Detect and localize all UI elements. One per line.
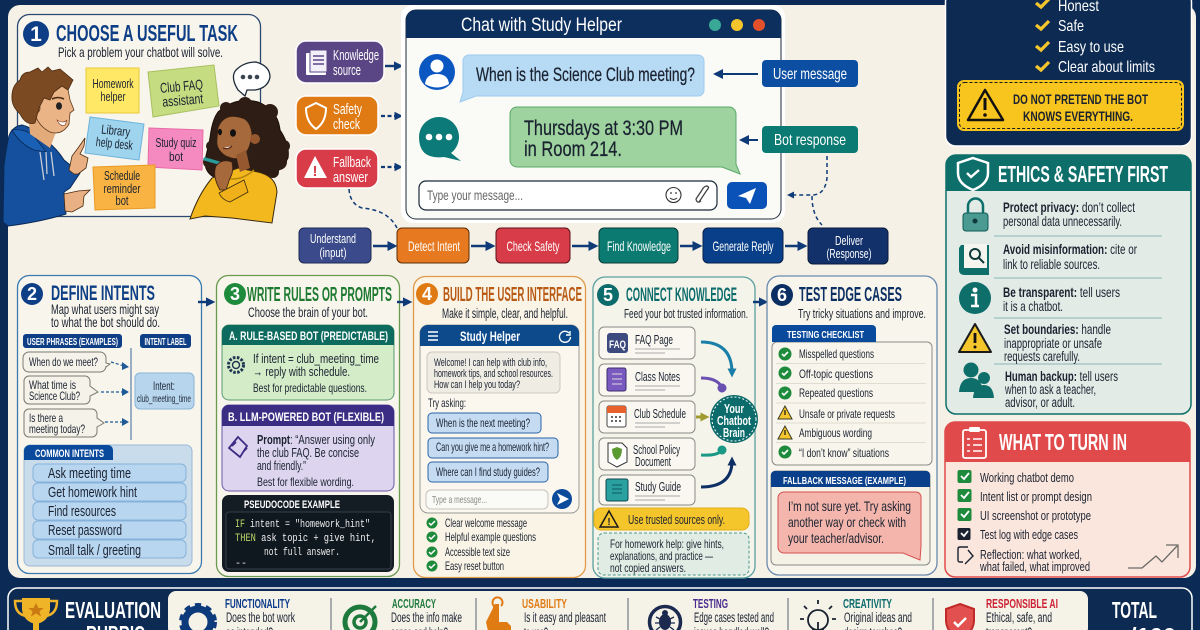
total score: TOTAL (1112, 597, 1157, 623)
flow step: detect intent (397, 228, 469, 263)
side box: knowledge source: Knowledge (333, 47, 379, 64)
flow step: check safety: Check Safety (506, 238, 560, 254)
message field: Type a message... (432, 494, 487, 506)
rubric title: EVALUATION (65, 597, 161, 623)
label: user message: User message (773, 66, 847, 83)
rubric: accuracy: Does the info make (391, 610, 462, 625)
arrow: safety to chat (381, 115, 400, 117)
turn-in checklist: Reflection: what worked, (980, 547, 1082, 562)
source: club schedule: Club Schedule (634, 406, 686, 421)
subtitle: Pick a problem your chatbot will solve. (58, 44, 223, 60)
testing checklist: Unsafe or private requests (799, 407, 895, 421)
code block: pseudocode: IF intent = "homework_hint" (235, 519, 370, 531)
flow step: understand (299, 228, 371, 263)
flow step: understand: (input) (320, 245, 346, 260)
tab: user phrases (23, 334, 122, 348)
chat header: Chat with Study Helper (461, 15, 623, 36)
bubble: is there a meeting (24, 409, 104, 437)
sticky: study quiz bot (148, 128, 203, 170)
app mockup: Try asking: (428, 396, 466, 410)
icon: refresh (560, 331, 570, 342)
heading: step 3: 3 (230, 284, 240, 304)
sticky: library help desk: Library (101, 122, 131, 140)
sticky: homework helper (86, 68, 139, 113)
arrow: fallback to detect intent (349, 189, 397, 228)
sticky: homework helper: helper (100, 89, 126, 104)
card B: LLM-powered bot: Best for flexible wording. (257, 475, 354, 489)
side box: fallback answer: answer (333, 169, 368, 186)
card A: rule-based bot (222, 325, 394, 400)
subtitle: Feed your bot trusted information. (624, 306, 748, 321)
welcome bubble: How can I help you today? (434, 379, 520, 391)
message input (419, 181, 717, 210)
bubble: what time: What time is (29, 378, 76, 392)
bubble: when do we meet (23, 352, 110, 372)
checklist: bot qualities (1036, 0, 1155, 76)
rubric: testing: TESTING (693, 596, 728, 611)
panel: what to turn in (945, 422, 1190, 577)
homework help note: For homework help: give hints, (610, 537, 724, 551)
heading: step 5: 5 (603, 285, 613, 305)
source: study guide: Study Guide (635, 479, 681, 494)
red header: WHAT TO TURN IN (999, 429, 1127, 455)
source: FAQ page (599, 327, 695, 359)
icon: upward trend (1128, 545, 1178, 568)
side box: safety check: check (333, 116, 360, 133)
fallback message: your teacher/advisor. (788, 530, 884, 546)
source: study guide (599, 475, 695, 505)
icon: sparkle brain (229, 437, 247, 457)
code block: pseudocode: THEN ask topic + give hint, (235, 533, 376, 545)
heading: step 1 (23, 20, 238, 47)
item: set boundaries: requests carefully. (1004, 349, 1080, 364)
side box: safety check (296, 96, 378, 135)
welcome bubble: homework tips, and school resources. (434, 368, 553, 380)
item: be transparent: it is a chatbot. (1003, 298, 1063, 314)
bubble: when do we meet: When do we meet? (29, 355, 98, 369)
bubble: is there a meeting: meeting today? (29, 422, 85, 436)
intent list: Ask meeting time (48, 466, 131, 482)
rubric title (65, 597, 161, 630)
suggestion buttons: When is the next meeting? (436, 416, 530, 430)
item: set boundaries (959, 321, 1111, 364)
item: set boundaries: inappropriate or unsafe (1004, 336, 1102, 351)
panel 4: build the user interface (414, 276, 586, 578)
knowledge arrows (696, 342, 732, 487)
flow step: find knowledge (599, 228, 678, 263)
flow step: deliver (808, 228, 888, 264)
arrow: step 3 to 4 (397, 301, 409, 303)
sticky: homework helper: Homework (92, 76, 134, 91)
turn-in checklist: Intent list or prompt design (980, 489, 1092, 504)
item: avoid misinformation: Avoid misinformation: cite or (1003, 241, 1137, 257)
intent box: Intent: (153, 381, 175, 393)
source: school policy (599, 438, 695, 470)
rubric: responsible AI: Ethical, safe, and (986, 610, 1052, 625)
side box: knowledge source (296, 41, 384, 83)
panel: bot qualities (946, 0, 1192, 146)
arrow: knowledge to chat (385, 65, 400, 67)
rubric: usability: Is it easy and pleasant (524, 610, 606, 625)
sticky: study quiz bot: bot (169, 149, 183, 164)
checklist: Helpful example questions (445, 530, 536, 544)
sticky: club FAQ assistant (148, 65, 219, 117)
rubric: functionality: Does the bot work (226, 610, 295, 625)
card A: rule-based bot: A. RULE-BASED BOT (PREDICTABLE) (229, 329, 388, 343)
testing checklist: Misspelled questions (799, 347, 874, 361)
rubric: accuracy: ACCURACY (392, 596, 436, 611)
tab: user phrases: USER PHRASES (EXAMPLES) (27, 336, 118, 348)
intent list: Reset password (48, 523, 122, 539)
flow step: deliver: (Response) (826, 246, 872, 261)
text: ! (312, 163, 318, 180)
intent list: Small talk / greeting (48, 543, 141, 559)
arrowheads (122, 362, 129, 426)
your chatbot brain (710, 395, 758, 443)
card B: LLM-powered bot: B. LLM-POWERED BOT (FLEXIBLE) (228, 410, 384, 424)
item: set boundaries: Set boundaries: handle (1004, 321, 1111, 337)
checklist (426, 516, 536, 573)
item: avoid misinformation: link to reliable sources. (1003, 256, 1100, 272)
fallback message: another way or check with (788, 514, 906, 530)
suggestion buttons (428, 413, 558, 482)
icon: gear (228, 358, 244, 372)
sticky: club FAQ assistant: assistant (162, 90, 204, 110)
heading: step 2: DEFINE INTENTS (51, 282, 155, 305)
flow step: detect intent: Detect Intent (408, 238, 460, 254)
text: BUILD THE USER INTERFACE (443, 284, 582, 306)
warning banner: DO NOT PRETEND THE BOT (1013, 91, 1148, 107)
illustration: girl in yellow sweater (190, 97, 290, 223)
label: user message (762, 60, 858, 87)
testing checklist: TESTING CHECKLIST (787, 329, 864, 341)
side box: fallback answer: Fallback (333, 154, 371, 171)
arrow: user message label (717, 73, 758, 75)
intent list: Get homework hint (48, 485, 137, 501)
homework help note (598, 533, 749, 575)
rubric bar (8, 588, 1192, 630)
icon: speech bubble (233, 62, 270, 96)
heading: step 4: 4 (422, 284, 432, 304)
side box: safety check: Safety (333, 101, 362, 118)
testing checklist (772, 325, 932, 465)
warning banner (957, 80, 1184, 131)
fallback message: I’m not sure yet. Try asking (788, 498, 911, 514)
card B: LLM-powered bot: Prompt: “Answer using only (257, 432, 375, 447)
app mockup: Study Helper (460, 329, 521, 344)
arrow: deliver to chat (790, 156, 827, 225)
arrow: bot response label (743, 139, 758, 141)
trusted sources note (594, 508, 749, 530)
card A: rule-based bot: → reply with schedule. (253, 364, 350, 379)
trusted sources note: ! (607, 517, 611, 528)
testing checklist: Ambiguous wording (799, 426, 872, 440)
panel 5: connect knowledge: CONNECT KNOWLEDGE (626, 285, 737, 306)
message field (426, 490, 548, 509)
item: protect privacy (963, 198, 1135, 231)
source: FAQ page: FAQ Page (635, 332, 673, 347)
intent box (135, 373, 194, 409)
checklist: Easy reset button (445, 559, 504, 573)
subtitle: Make it simple, clear, and helpful. (442, 306, 568, 321)
panel: common intents: COMMON INTENTS (35, 448, 104, 460)
intent list: Find resources (48, 504, 116, 520)
heading: step 6 (771, 284, 902, 306)
flow step: find knowledge: Find Knowledge (607, 238, 671, 254)
user message bubble: When is the Science Club meeting? (476, 64, 695, 86)
fallback message: FALLBACK MESSAGE (EXAMPLE) (783, 475, 906, 487)
rubric: testing (650, 596, 774, 630)
item: human backup: Human backup: tell users (1005, 368, 1118, 384)
fallback message (771, 471, 930, 565)
rubric: functionality (181, 596, 295, 630)
item: human backup: advisor, or adult. (1005, 395, 1075, 410)
rubric: responsible AI (946, 596, 1058, 630)
panel 5: connect knowledge (593, 277, 758, 578)
homework help note: explanations, and practice — (610, 549, 713, 563)
heading: step 1: 1 (30, 23, 42, 46)
sticky: club FAQ assistant: Club FAQ (159, 76, 204, 96)
checklist: bot qualities: Clear about limits (1058, 59, 1155, 76)
bot response bubble (510, 107, 740, 174)
panel 2: define intents (18, 276, 202, 574)
label: bot response (762, 126, 858, 153)
side box: knowledge source: source (333, 62, 361, 79)
source: class notes: Class Notes (635, 369, 680, 384)
flow step: understand: Understand (310, 231, 356, 246)
checklist: Clear welcome message (445, 516, 527, 530)
code block: pseudocode: -- (235, 559, 247, 570)
item: protect privacy: personal data unnecessarily. (1003, 213, 1122, 229)
turn-in checklist: Working chatbot demo (980, 470, 1074, 485)
code block: pseudocode (222, 495, 394, 572)
item: human backup: when to ask a teacher, (1004, 382, 1096, 397)
side box: fallback answer (296, 149, 378, 188)
testing checklist: “I don’t know” situations (799, 446, 889, 460)
arrow: step 2 to 3 (198, 301, 212, 303)
rubric: accuracy (345, 596, 462, 630)
heading: step 3: WRITE RULES OR PROMPTS (247, 284, 392, 306)
ethics header (946, 155, 1191, 191)
card A: rule-based bot: If intent = club_meeting_time (253, 351, 379, 366)
icon: warning (304, 156, 327, 178)
card B: LLM-powered bot: the club FAQ. Be concise (257, 445, 359, 460)
testing checklist: Repeated questions (799, 386, 873, 400)
bubble: is there a meeting: Is there a (29, 411, 63, 425)
card A: rule-based bot: Best for predictable questions. (253, 381, 367, 395)
sticky: study quiz bot: Study quiz (156, 135, 196, 150)
card B: LLM-powered bot: and friendly.” (257, 458, 306, 473)
panel 6: test edge cases (767, 276, 937, 575)
panel: chat window (401, 5, 785, 223)
bubble: what time (24, 376, 98, 404)
sticky: schedule reminder bot: reminder (104, 181, 141, 196)
arrow: step 5 to 6 (753, 301, 765, 303)
heading: step 2: 2 (27, 284, 37, 304)
turn-in checklist: UI screenshot or prototype (980, 508, 1091, 523)
bot response bubble: in Room 214. (524, 138, 622, 161)
sticky: schedule reminder bot: Schedule (104, 168, 140, 183)
turn-in checklist: what failed, what improved (979, 559, 1090, 574)
icon: user avatar (419, 54, 455, 90)
testing checklist: Off-topic questions (799, 367, 873, 381)
app mockup (420, 325, 579, 513)
code block: pseudocode: PSEUDOCODE EXAMPLE (244, 499, 340, 511)
fallback speech bubble (778, 492, 921, 560)
flow step: generate reply (703, 228, 783, 263)
rubric: creativity: Original ideas and (844, 610, 912, 625)
source: FAQ page: FAQ (609, 339, 626, 351)
bubble: what time: Science Club? (29, 389, 80, 403)
illustration: boy in blue hoodie (3, 67, 90, 226)
checklist: Accessible text size (445, 545, 510, 559)
panel: ethics and safety first (946, 155, 1191, 414)
subtitle: Map what users might say (51, 301, 159, 317)
flow step: deliver: Deliver (835, 233, 863, 248)
icon: book (306, 50, 327, 75)
intent list (33, 464, 186, 559)
subtitle: Choose the brain of your bot. (248, 305, 368, 320)
rubric: usability (486, 596, 606, 630)
dashed arrows (101, 362, 124, 422)
red header (945, 422, 1190, 462)
message input: Type your message... (427, 187, 523, 203)
source: class notes (599, 364, 695, 396)
item: avoid misinformation (959, 241, 1137, 275)
card B: LLM-powered bot (222, 405, 394, 491)
welcome bubble: Welcome! I can help with club info, (434, 357, 547, 369)
warning banner: KNOWS EVERYTHING. (1023, 108, 1133, 124)
checklist: bot qualities: Safe (1058, 18, 1084, 35)
icon: shield (306, 103, 326, 129)
homework help note: not copied answers. (610, 561, 686, 575)
send button (727, 182, 767, 209)
heading: step 2 (21, 282, 155, 305)
flow: pipeline (299, 228, 888, 264)
tab: intent label: INTENT LABEL (144, 336, 187, 348)
subtitle: to what the bot should do. (51, 314, 160, 330)
checklist: bot qualities: Easy to use (1058, 39, 1124, 56)
rubric: usability: USABILITY (522, 596, 567, 611)
your chatbot brain: Chatbot (717, 414, 752, 428)
panel 1: choose a useful task (3, 14, 290, 226)
rubric: responsible AI: RESPONSIBLE AI (986, 596, 1058, 611)
icon: trophy (15, 598, 57, 630)
item: be transparent: Be transparent: tell users (1003, 284, 1120, 300)
suggestion buttons: Can you give me a homework hint? (436, 440, 549, 454)
rubric: functionality: FUNCTIONALITY (225, 596, 290, 611)
send icon (552, 489, 572, 509)
heading: step 5 (597, 284, 737, 306)
turn-in checklist: Test log with edge cases (980, 527, 1078, 542)
heading: step 3 (224, 283, 392, 306)
rubric: testing: Edge cases tested and (694, 610, 774, 625)
trusted sources note: Use trusted sources only. (628, 512, 725, 527)
icon: menu (428, 332, 438, 340)
welcome bubble (427, 352, 560, 393)
icon: bot avatar (419, 117, 461, 161)
bot response bubble: Thursdays at 3:30 PM (524, 117, 683, 140)
heading: step 6: 6 (777, 285, 787, 305)
rubric: creativity (800, 596, 912, 630)
source: club schedule (599, 401, 695, 433)
heading: step 4 (416, 283, 582, 306)
arrow: fallback to chat (381, 166, 400, 168)
sticky: library help desk (85, 117, 144, 160)
your chatbot brain: Brain (723, 426, 745, 440)
sticky: schedule reminder bot: bot (116, 193, 129, 208)
sticky: schedule reminder bot (93, 165, 155, 210)
flow step: check safety (496, 228, 570, 263)
turn-in checklist (958, 470, 1092, 574)
heading: step 1: CHOOSE A USEFUL TASK (56, 20, 238, 46)
sticky: library help desk: help desk (95, 134, 134, 153)
suggestion buttons: Where can I find study guides? (436, 465, 540, 479)
subtitle: Try tricky situations and improve. (798, 306, 926, 321)
tab: intent label (140, 334, 191, 348)
panel 3: write rules or prompts (216, 276, 400, 576)
heading: step 6: TEST EDGE CASES (799, 284, 902, 306)
your chatbot brain: Your (724, 402, 744, 416)
label: bot response: Bot response (774, 132, 846, 149)
item: protect privacy: Protect privacy: don’t collect (1003, 199, 1135, 215)
flow step: generate reply: Generate Reply (712, 238, 774, 254)
panel: common intents (24, 445, 192, 566)
item: human backup (959, 362, 1118, 410)
source: school policy: School Policy (633, 442, 680, 457)
user message bubble (460, 55, 704, 102)
item: be transparent (959, 282, 1120, 314)
chat header (406, 10, 781, 38)
rubric: creativity: CREATIVITY (843, 596, 892, 611)
source: school policy: Document (635, 454, 671, 469)
intent box: club_meeting_time (137, 394, 191, 405)
total score (1112, 597, 1176, 630)
subtitle (51, 301, 160, 330)
code block: pseudocode: not full answer. (264, 547, 340, 559)
